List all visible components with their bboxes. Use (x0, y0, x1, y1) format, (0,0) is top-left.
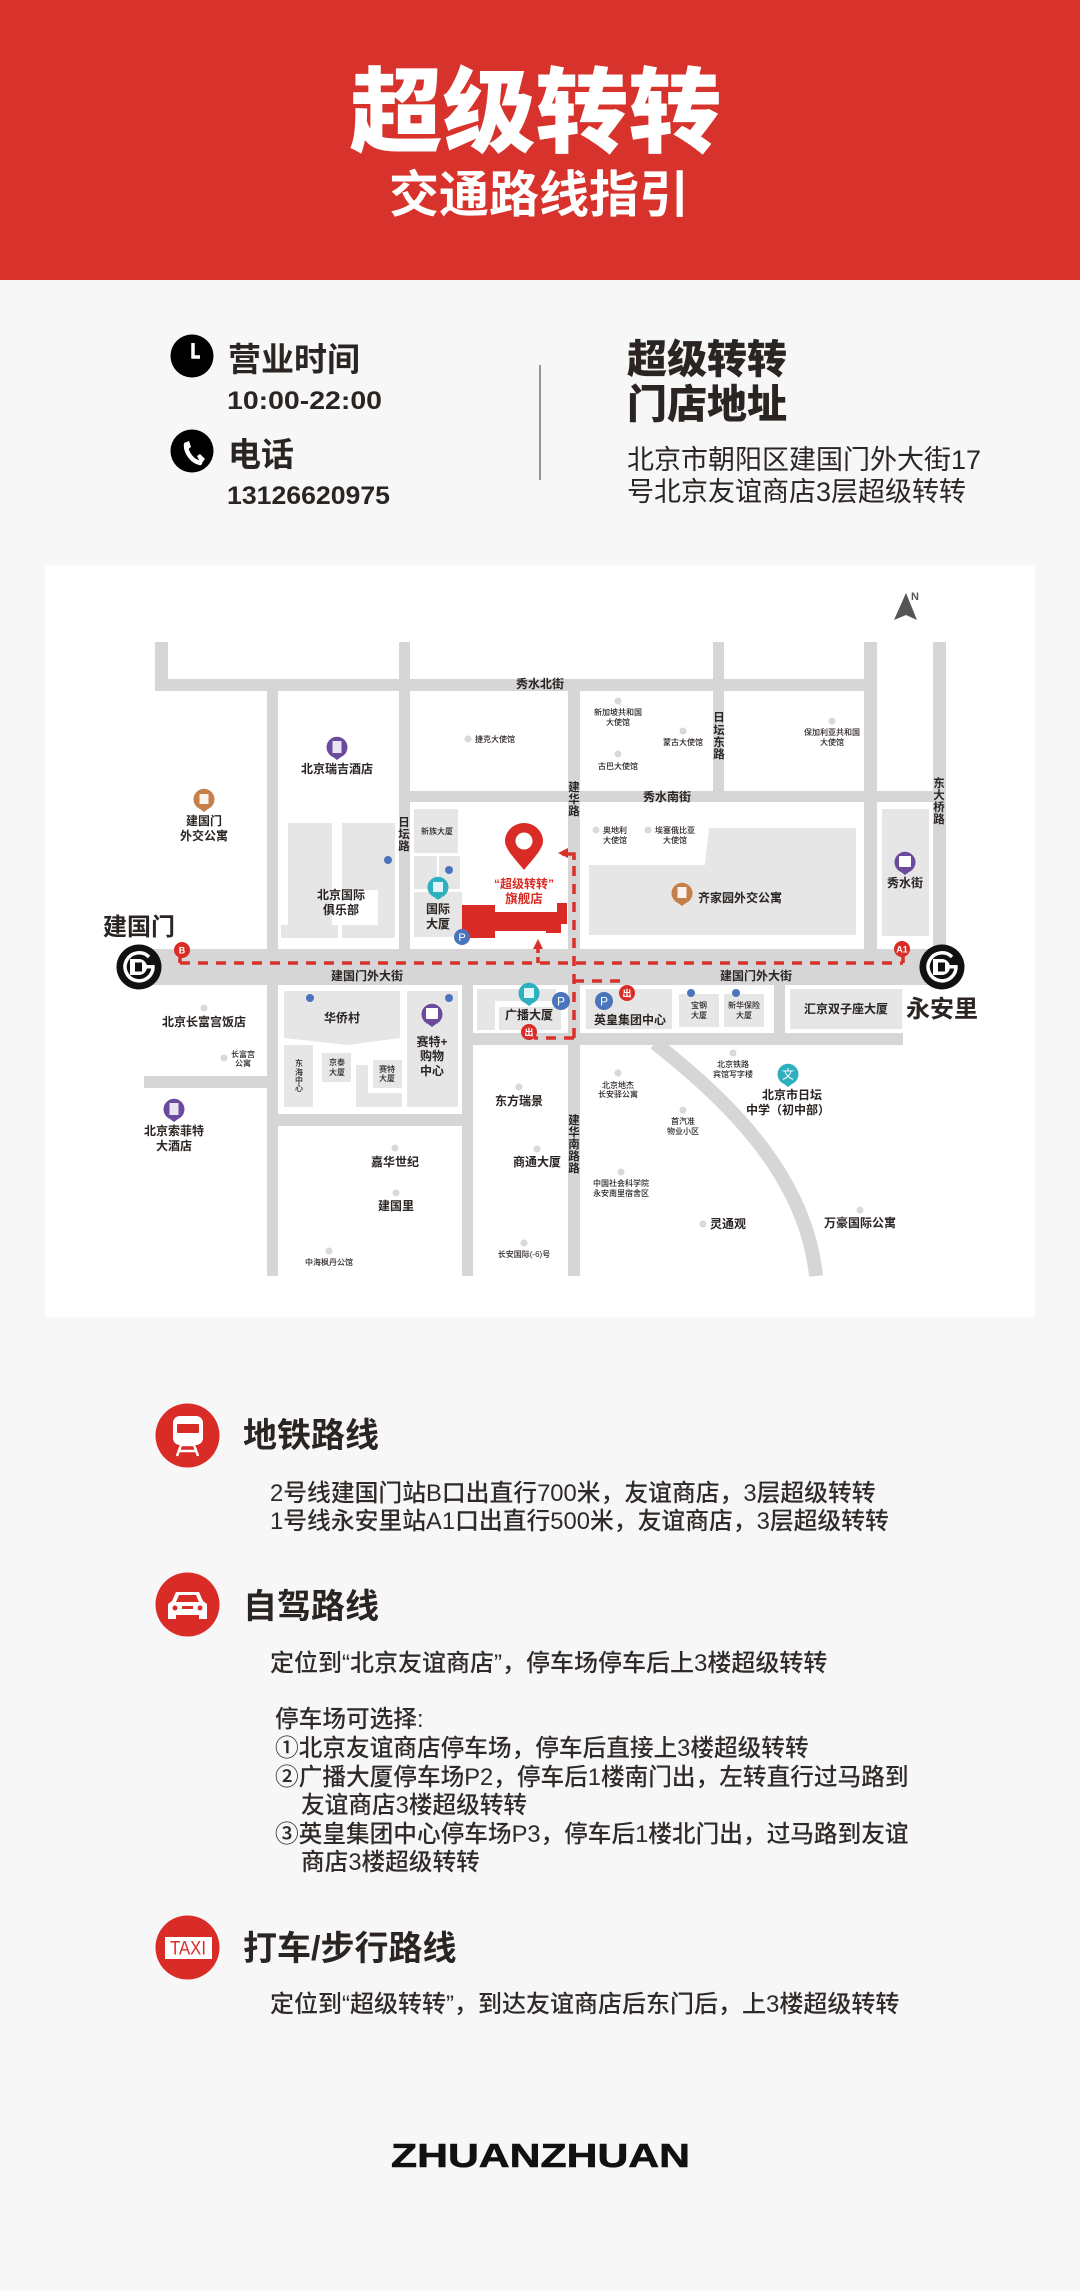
small place labels: 大使馆 (820, 737, 844, 747)
street labels: 秀水北街 (516, 676, 564, 691)
poi dots (200, 698, 864, 1254)
phone heading: 电话 (228, 436, 294, 473)
section: taxi and walking route (156, 1916, 899, 2018)
small place labels: 新族大厦 (421, 826, 453, 836)
large place labels: 大厦 (426, 916, 450, 931)
small place labels: 大厦 (379, 1073, 395, 1083)
heading: 地铁路线 (243, 1417, 379, 1455)
small place labels: 奥地利 (603, 825, 627, 835)
icon: clock (170, 334, 214, 378)
street labels: 大 (933, 788, 945, 802)
large place labels: 赛特+ (416, 1034, 448, 1049)
subtitle: 交通路线指引 (389, 167, 689, 223)
small place labels (231, 707, 860, 1267)
small place labels: 大厦 (329, 1067, 345, 1077)
small place labels: 物业小区 (667, 1126, 699, 1136)
large place labels: 俱乐部 (323, 902, 359, 917)
parking markers: P (600, 994, 608, 1008)
icon: taxi (156, 1916, 220, 1980)
exit badges (174, 941, 910, 1040)
small place labels: 长富宫 (231, 1049, 255, 1059)
hours value: 10:00-22:00 (227, 387, 382, 415)
large place labels: 灵通观 (710, 1216, 746, 1231)
street labels: 桥 (933, 800, 945, 814)
small place labels: 大使馆 (663, 835, 687, 845)
exit badges: B (179, 946, 186, 956)
large place labels: 汇京双子座大厦 (804, 1001, 888, 1016)
store building (462, 903, 567, 938)
exit badges: A1 (896, 944, 908, 954)
street labels: 日 (398, 816, 410, 829)
street labels: 路 (568, 1161, 580, 1175)
street labels: 坛 (713, 724, 725, 737)
address heading: 超级转转 (627, 338, 787, 382)
small place labels: 新加坡共和国 (594, 707, 642, 717)
icon: phone (170, 430, 214, 472)
metro station: Yonganli (906, 944, 978, 1023)
street labels: 路 (398, 839, 410, 853)
metro station: Jianguomen (103, 914, 175, 990)
small place labels: 长安国际(-6)号 (498, 1249, 550, 1259)
parking options: 停车场可选择: (275, 1706, 424, 1733)
large place labels: 北京瑞吉酒店 (301, 761, 373, 776)
parking options: 商店3楼超级转转 (301, 1849, 480, 1876)
metro station: Jianguomen: 建国门 (103, 914, 175, 941)
poi marker icons: 文 (782, 1066, 794, 1082)
small place labels: 中 (295, 1075, 303, 1085)
heading: 打车/步行路线 (243, 1930, 456, 1968)
street labels: 建 (568, 1113, 580, 1127)
icon: north arrow (894, 591, 919, 620)
small place labels: 东 (295, 1058, 303, 1068)
small place labels: 长安驿公寓 (598, 1089, 638, 1099)
large place labels: 购物 (420, 1048, 444, 1063)
phone block (170, 430, 390, 510)
address text (627, 445, 981, 507)
route text: 2号线建国门站B口出直行700米，友谊商店，3层超级转转 (270, 1480, 876, 1507)
large place labels: 齐家园外交公寓 (698, 890, 782, 905)
footer brand: ZHUANZHUAN (391, 2137, 690, 2174)
street labels: 路 (568, 804, 580, 818)
large place labels: 国际 (426, 902, 450, 916)
small place labels: 心 (295, 1084, 303, 1093)
parking markers (306, 856, 740, 1010)
small place labels: 大厦 (691, 1010, 707, 1020)
street labels: 建国门外大街 (331, 968, 403, 983)
route arrows (533, 848, 568, 949)
small place labels: 古巴大使馆 (598, 761, 638, 771)
street labels: 东 (713, 735, 725, 749)
large place labels: 大酒店 (156, 1138, 192, 1153)
map buildings (281, 809, 929, 1107)
small place labels: 北京铁路 (717, 1059, 749, 1069)
section: driving route (156, 1572, 909, 1876)
route text (270, 1480, 889, 1535)
store label: 旗舰店 (505, 891, 543, 906)
parking markers: P (458, 932, 466, 944)
route text: 定位到“超级转转”，到达友谊商店后东门后，上3楼超级转转 (270, 1991, 899, 2018)
large place labels (144, 761, 923, 1231)
street labels: 建 (568, 780, 580, 794)
small place labels: 保加利亚共和国 (804, 727, 860, 737)
large place labels: 广播大厦 (505, 1007, 553, 1022)
street labels (331, 676, 945, 1175)
small place labels: 北京地杰 (602, 1080, 634, 1090)
parking options: ①北京友谊商店停车场，停车后直接上3楼超级转转 (275, 1735, 809, 1762)
street labels: 东 (933, 776, 945, 790)
large place labels: 华侨村 (324, 1010, 360, 1025)
small place labels: 大厦 (736, 1010, 752, 1020)
metro station: Yonganli: 永安里 (906, 996, 978, 1023)
street labels: 路 (568, 1149, 580, 1163)
heading: 自驾路线 (243, 1588, 379, 1626)
route text: 定位到“北京友谊商店”，停车场停车后上3楼超级转转 (270, 1650, 827, 1677)
parking options: 友谊商店3楼超级转转 (301, 1792, 527, 1819)
street labels: 坛 (398, 828, 410, 841)
route text: 1号线永安里站A1口出直行500米，友谊商店，3层超级转转 (270, 1508, 889, 1535)
parking options: ③英皇集团中心停车场P3，停车后1楼北门出，过马路到友谊 (275, 1821, 909, 1848)
large place labels: 英皇集团中心 (594, 1012, 666, 1027)
large place labels: 北京市日坛 (762, 1087, 822, 1102)
exit badges: 出 (524, 1026, 534, 1038)
small place labels: 蒙古大使馆 (663, 737, 703, 747)
large place labels: 北京索菲特 (144, 1123, 204, 1138)
panel: map (45, 565, 1035, 1317)
icon: north arrow: N (911, 591, 919, 603)
small place labels: 赛特 (379, 1064, 395, 1074)
address text: 北京市朝阳区建国门外大街17 (627, 445, 981, 475)
small place labels: 捷克大使馆 (475, 734, 515, 744)
icon: train (156, 1404, 220, 1468)
street labels: 路 (933, 812, 945, 826)
hours heading: 营业时间 (228, 341, 360, 378)
small place labels: 首汽准 (671, 1116, 695, 1126)
large place labels: 中学（初中部） (746, 1102, 830, 1117)
large place labels: 秀水街 (887, 875, 923, 890)
small place labels: 埃塞俄比亚 (655, 825, 695, 835)
small place labels: 宝钢 (691, 1000, 707, 1010)
large place labels: 嘉华世纪 (371, 1154, 419, 1169)
store label: “超级转转” (494, 876, 554, 891)
large place labels: 建国门 (186, 813, 222, 828)
large place labels: 东方瑞景 (495, 1093, 543, 1108)
small place labels: 宾馆写字楼 (713, 1069, 753, 1079)
large place labels: 商通大厦 (513, 1154, 561, 1169)
parking markers: P (557, 994, 565, 1008)
store label (494, 876, 554, 906)
business hours block (170, 334, 382, 415)
address heading: 门店地址 (627, 383, 787, 427)
small place labels: 大使馆 (606, 717, 630, 727)
large place labels: 北京长富宫饭店 (162, 1014, 246, 1029)
store address block (627, 338, 981, 507)
section: subway route (156, 1404, 889, 1535)
large place labels: 建国里 (378, 1198, 414, 1213)
large place labels: 外交公寓 (180, 828, 228, 843)
street labels: 日 (713, 711, 725, 724)
large place labels: 中心 (420, 1063, 444, 1078)
poi marker icons (164, 737, 916, 1122)
icon: car (156, 1572, 220, 1636)
address heading (627, 338, 787, 427)
small place labels: 京泰 (329, 1057, 345, 1067)
address text: 号北京友谊商店3层超级转转 (627, 477, 966, 507)
icon: taxi: TAXI (170, 1938, 206, 1960)
street labels: 南 (568, 1138, 580, 1151)
small place labels: 中国社会科学院 (593, 1178, 649, 1188)
small place labels: 海 (295, 1067, 303, 1077)
small place labels: 中海枫丹公馆 (305, 1257, 353, 1267)
small place labels: 新华保险 (728, 1000, 760, 1010)
phone number: 13126620975 (227, 482, 390, 510)
large place labels: 北京国际 (317, 887, 365, 902)
street labels: 路 (713, 747, 725, 761)
small place labels: 永安南里宿舍区 (593, 1188, 649, 1198)
small place labels: 大使馆 (603, 835, 627, 845)
icon: store location pin (505, 823, 543, 870)
route dashed lines (180, 854, 903, 1038)
street labels: 华 (568, 792, 580, 806)
parking options: ②广播大厦停车场P2，停车后1楼南门出，左转直行过马路到 (275, 1764, 909, 1791)
street labels: 秀水南街 (643, 789, 691, 804)
map roads (144, 642, 946, 1276)
street labels: 华 (568, 1125, 580, 1139)
small place labels: 公寓 (235, 1058, 251, 1068)
large place labels: 万豪国际公寓 (824, 1215, 896, 1230)
street labels: 建国门外大街 (720, 968, 792, 983)
title: 超级转转 (350, 61, 722, 165)
parking options (275, 1706, 909, 1876)
header banner (0, 0, 1080, 280)
exit badges: 出 (622, 988, 632, 998)
